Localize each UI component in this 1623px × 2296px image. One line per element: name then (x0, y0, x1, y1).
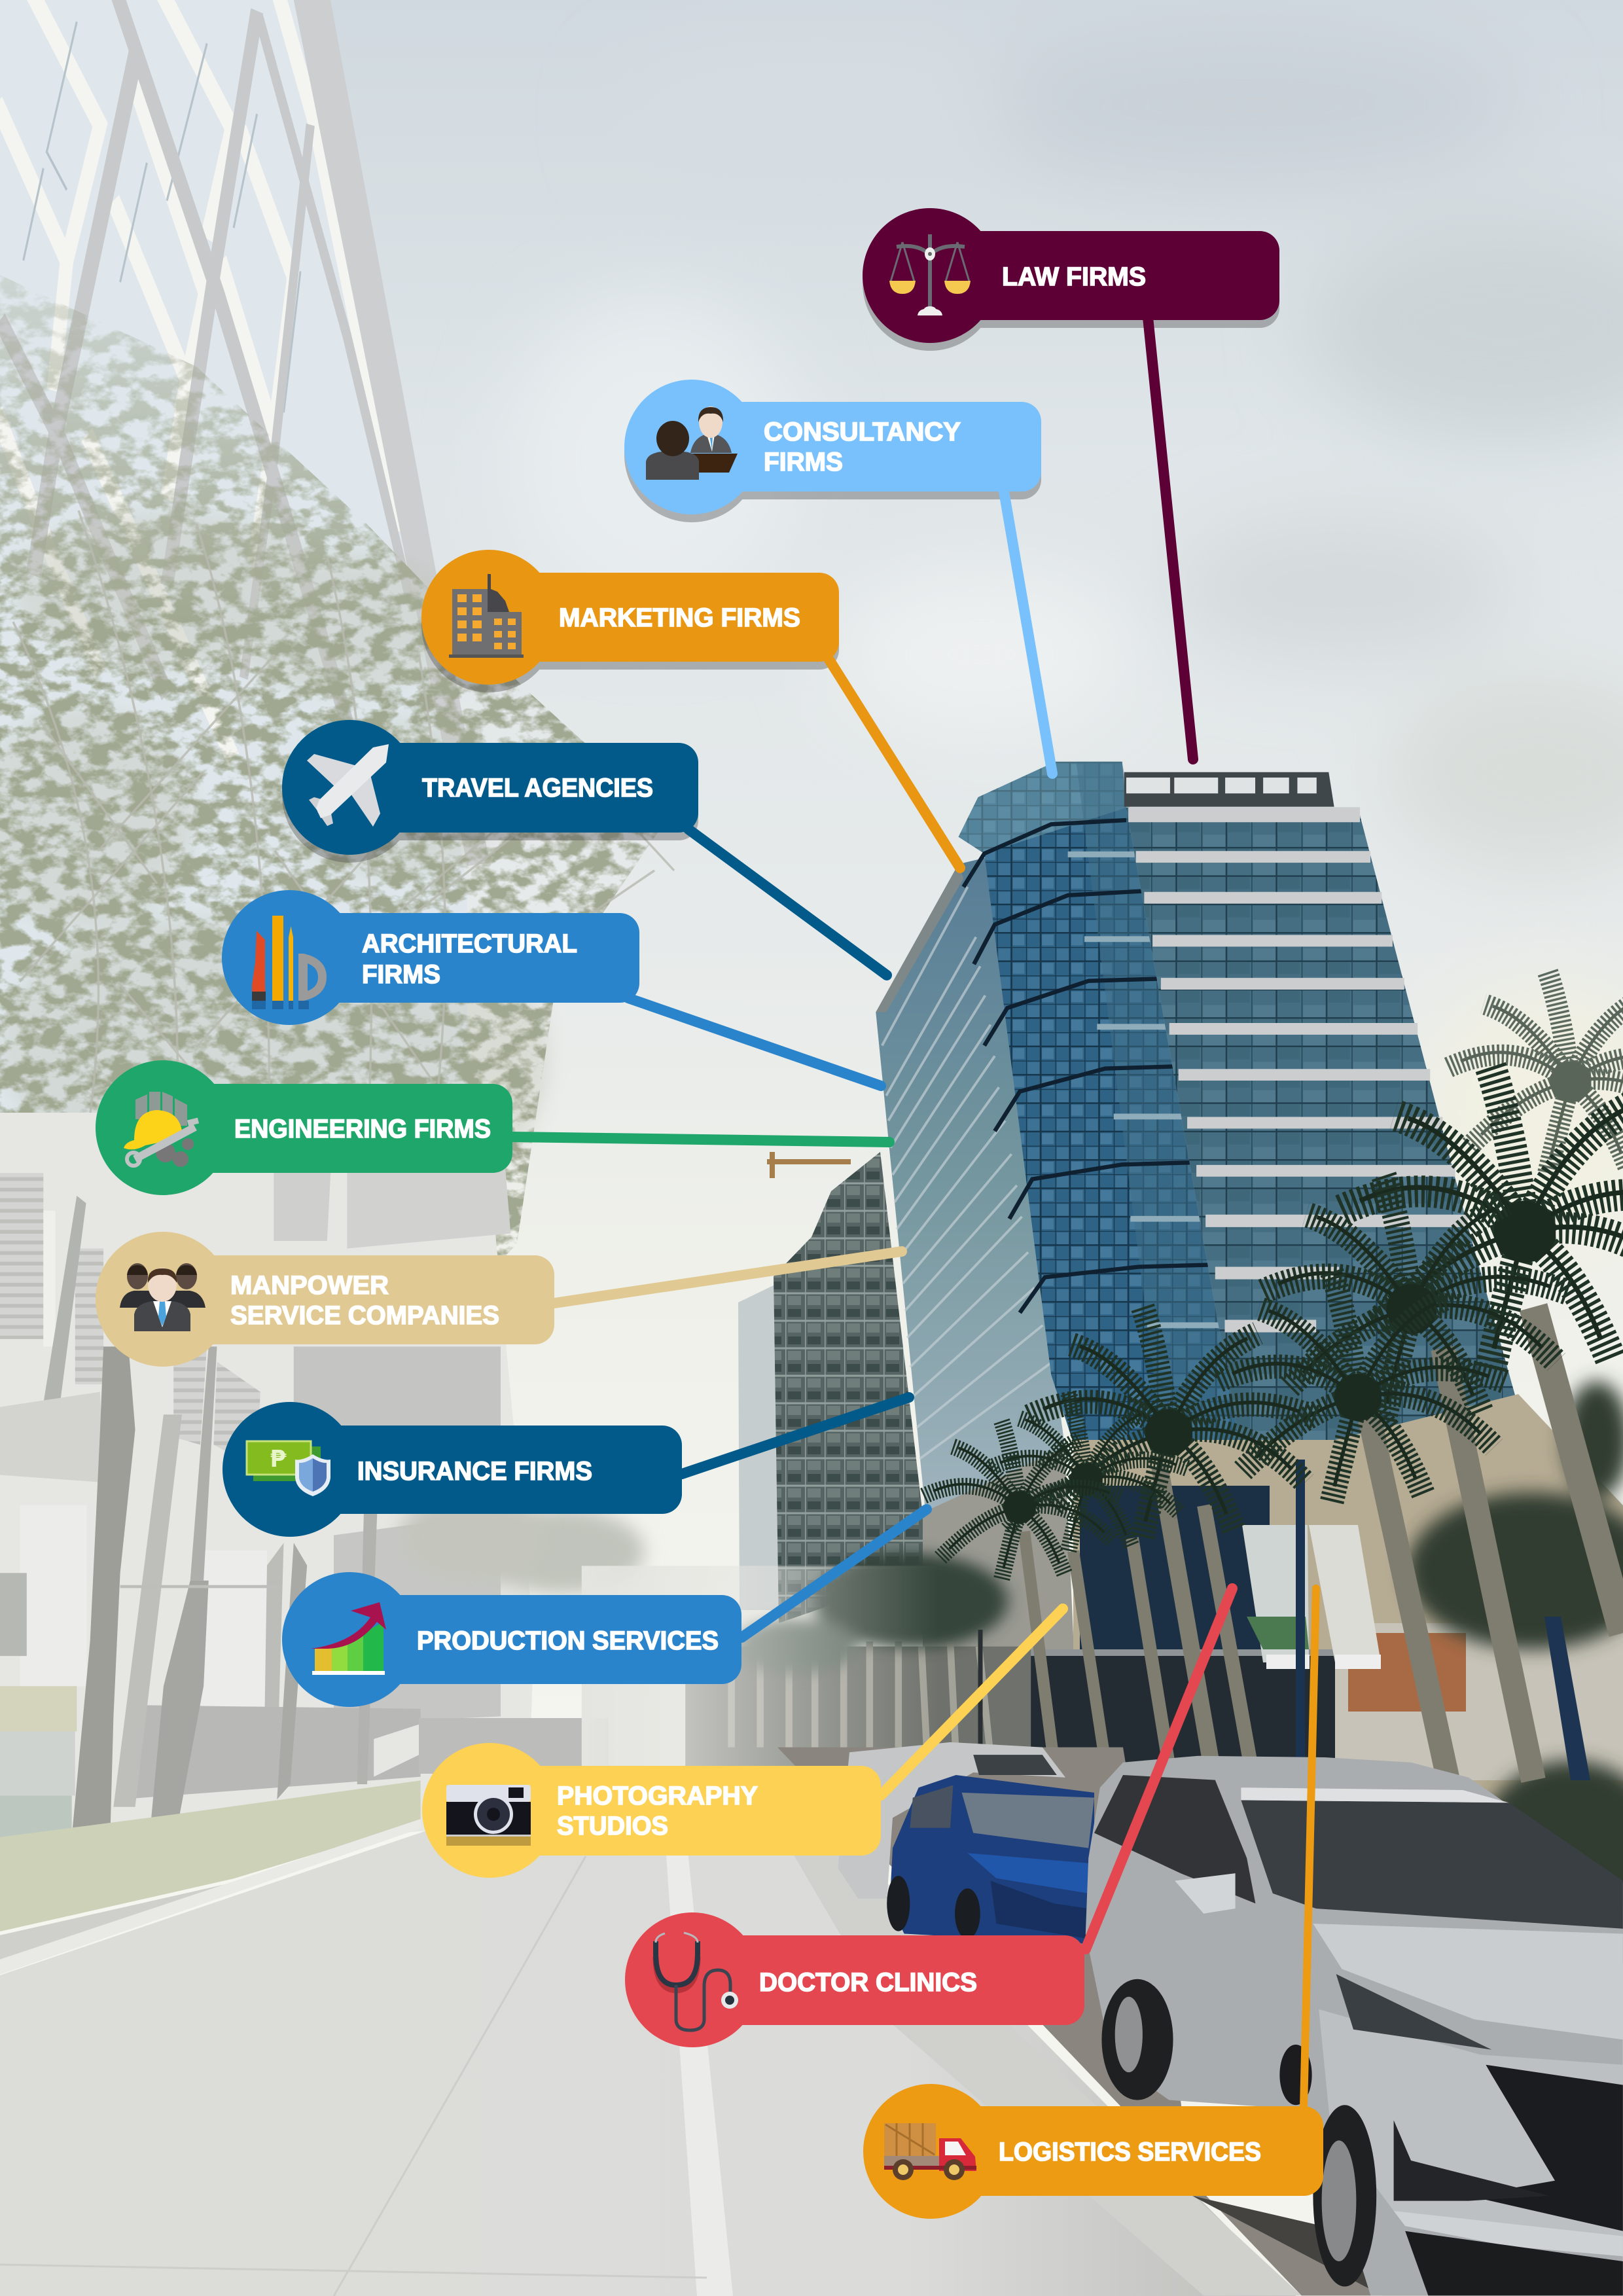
icon: growth chart (311, 1602, 386, 1675)
label: ENGINEERING FIRMS (234, 1115, 491, 1143)
palm trees (923, 972, 1623, 1780)
connector line (741, 1509, 927, 1638)
white window frames (0, 0, 399, 760)
icon: helmet and wrench (124, 1092, 198, 1167)
faded office building, upper left (0, 0, 490, 1172)
icon: money and shield: ₱ (270, 1446, 287, 1473)
faded trees on left (0, 275, 674, 1348)
main tower (876, 762, 1516, 1555)
label: LAW FIRMS (1002, 262, 1146, 291)
callout: law firms (863, 208, 1279, 759)
badge (96, 1232, 554, 1367)
street-level facades (923, 1381, 1623, 1964)
silver MPV (1086, 1756, 1623, 2295)
connector line (688, 829, 887, 975)
icon: camera (446, 1785, 531, 1846)
callout: consultancy firms (624, 380, 1052, 774)
distant palm row, hazy (582, 1553, 1031, 1787)
label: STUDIOS (557, 1812, 668, 1840)
callout: logistics services (863, 1588, 1323, 2219)
shadow (863, 216, 1279, 351)
badge (863, 208, 1279, 343)
blue sedan (887, 1775, 1094, 1944)
icon: stethoscope (656, 1933, 738, 2030)
label: CONSULTANCY (764, 418, 961, 446)
callout: photography studios (422, 1609, 1063, 1878)
badge (282, 1572, 741, 1707)
shadow (282, 728, 698, 863)
label (557, 1782, 758, 1840)
label: LOGISTICS SERVICES (999, 2138, 1261, 2166)
callout: engineering firms (96, 1060, 889, 1195)
icon: drafting tools (252, 916, 327, 1009)
callout: insurance firms (223, 1397, 909, 1537)
icon: consultants (646, 406, 738, 480)
connector line (1304, 1588, 1316, 2108)
callout: manpower service companies (96, 1232, 902, 1367)
label (230, 1271, 499, 1330)
icon: money and shield (247, 1441, 330, 1496)
label: PHOTOGRAPHY (557, 1782, 758, 1810)
callout: architectural firms (222, 890, 881, 1086)
tower left face (876, 857, 1065, 1513)
connector line (881, 1609, 1063, 1795)
distant faded tree and low block (399, 1492, 645, 1774)
label: SERVICE COMPANIES (230, 1301, 499, 1330)
connector line (829, 660, 960, 868)
connector line (1003, 488, 1052, 774)
kerb and sidewalk (755, 1748, 1623, 2295)
grey structural beams (0, 0, 374, 814)
connector line (1086, 1588, 1232, 1949)
icon: office building (449, 574, 524, 658)
tower centre face (959, 762, 1259, 1555)
connector line (512, 1137, 889, 1142)
faded low building and walkway, lower left (0, 1113, 534, 1975)
callout: marketing firms (421, 550, 960, 868)
callout: doctor clinics (625, 1588, 1232, 2047)
road surface (0, 1767, 1296, 2296)
badge (863, 2084, 1323, 2219)
connector line (1148, 317, 1193, 759)
icon: airplane (307, 744, 389, 827)
badge (421, 550, 839, 685)
label: DOCTOR CLINICS (759, 1968, 977, 1997)
badge (282, 720, 698, 855)
white car (838, 1742, 1065, 1899)
label: ARCHITECTURAL (362, 929, 577, 958)
shadow (421, 558, 839, 692)
connector line (554, 1251, 902, 1303)
label: FIRMS (764, 448, 843, 476)
label: INSURANCE FIRMS (357, 1457, 592, 1486)
label (764, 418, 961, 476)
cars and kerb at right (755, 1742, 1623, 2295)
badge (96, 1060, 512, 1195)
badge (222, 890, 639, 1025)
label: PRODUCTION SERVICES (417, 1626, 719, 1655)
connector line (682, 1397, 909, 1474)
callout: production services (282, 1509, 927, 1707)
label (362, 929, 577, 989)
label: MARKETING FIRMS (559, 603, 800, 632)
icon: scales (889, 234, 971, 315)
badge (624, 380, 1041, 514)
label: MANPOWER (230, 1271, 389, 1300)
badge (625, 1912, 1084, 2047)
rooftop railing (1124, 772, 1334, 807)
construction towers behind (738, 1152, 929, 1623)
tower right face with white bands (1126, 808, 1516, 1555)
icon: three staff (120, 1263, 205, 1331)
label: TRAVEL AGENCIES (422, 774, 653, 802)
connector line (628, 998, 881, 1086)
badge (422, 1743, 881, 1878)
badge (223, 1402, 682, 1537)
shadow (624, 387, 1041, 522)
callout: travel agencies (282, 720, 887, 975)
icon: delivery truck (884, 2123, 976, 2180)
label: FIRMS (362, 960, 440, 989)
